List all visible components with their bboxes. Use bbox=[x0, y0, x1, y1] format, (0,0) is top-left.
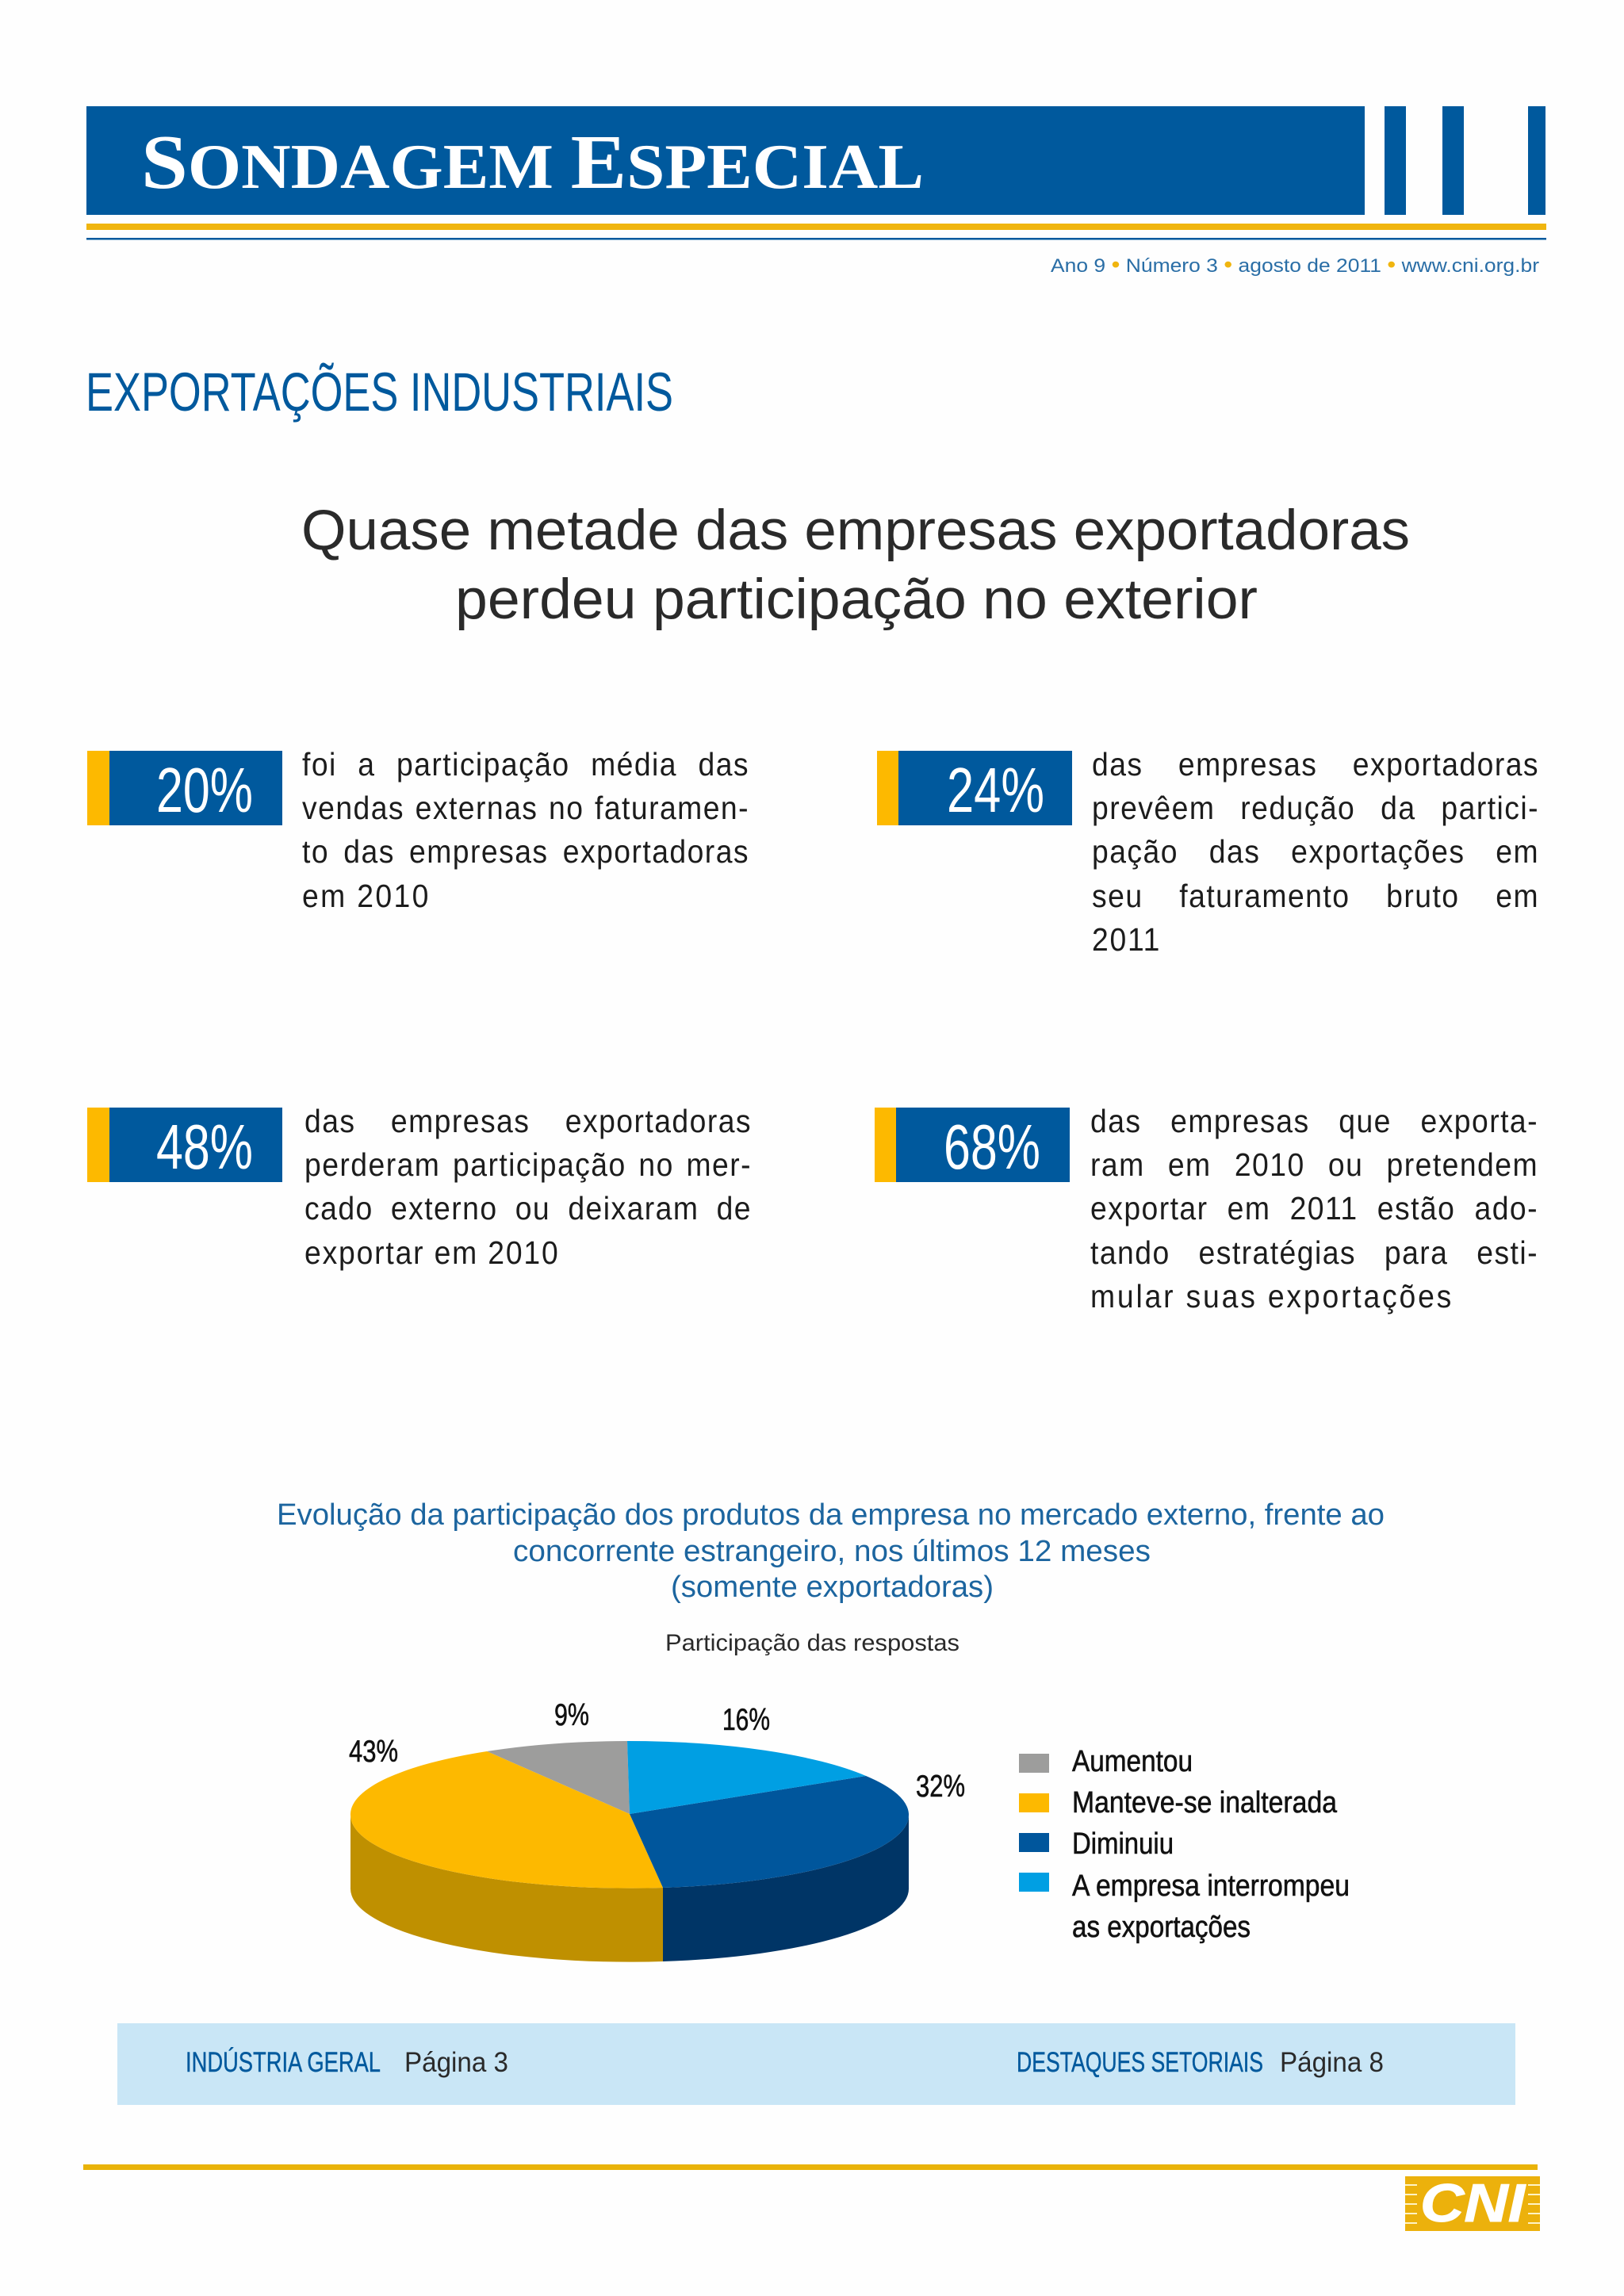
text: 48% description: perderam participação no mer- bbox=[304, 1146, 752, 1183]
headline bbox=[301, 499, 1410, 631]
text: 20% description: to das empresas exportadoras bbox=[302, 833, 749, 870]
slice: 9% Aumentou bbox=[487, 1741, 630, 1814]
text: 24% description: seu faturamento bruto em bbox=[1092, 878, 1539, 914]
title: Sondagem Especial: SONDAGEM ESPECIAL bbox=[141, 120, 924, 205]
footer navigation band: DESTAQUES SETORIAIS bbox=[1017, 2047, 1263, 2078]
text: 68% description: mular suas exportações bbox=[1090, 1278, 1454, 1314]
legend: as exportações bbox=[1072, 1911, 1251, 1944]
footer navigation band bbox=[117, 2023, 1515, 2105]
pie chart bbox=[349, 1698, 965, 1962]
badge: 24%: 24% bbox=[947, 755, 1044, 825]
text: 68% description: das empresas que exporta- bbox=[1090, 1103, 1538, 1139]
chart subtitle: Participação das respostas bbox=[665, 1630, 959, 1656]
CNI logo: CNI bbox=[1420, 2173, 1526, 2233]
slice: 32% Diminuiu bbox=[630, 1776, 909, 1888]
badge: 68%: 68% bbox=[944, 1112, 1040, 1182]
slice sides bbox=[350, 1814, 909, 1962]
CNI logo bbox=[1405, 2173, 1540, 2233]
legend: Aumentou bbox=[1072, 1745, 1193, 1778]
footer navigation band: Página 8 bbox=[1280, 2047, 1384, 2078]
badge: 48% bbox=[87, 1108, 282, 1182]
legend: Diminuiu bbox=[1072, 1827, 1174, 1861]
text: 68% description: exportar em 2011 estão ado- bbox=[1090, 1190, 1538, 1226]
badge: 20%: 20% bbox=[156, 755, 253, 825]
text: 24% description: 2011 bbox=[1092, 921, 1161, 958]
legend: A empresa interrompeu bbox=[1072, 1869, 1350, 1903]
pie labels: 9% bbox=[554, 1698, 589, 1732]
text: 68% description: ram em 2010 ou pretendem bbox=[1090, 1146, 1538, 1183]
panel: stat 20% bbox=[87, 746, 749, 914]
chart heading bbox=[277, 1498, 1385, 1604]
legend bbox=[1019, 1745, 1350, 1944]
pie labels: 16% bbox=[722, 1703, 770, 1737]
footer navigation band: INDÚSTRIA GERAL bbox=[186, 2047, 381, 2078]
text: 68% description bbox=[1090, 1103, 1538, 1314]
text: 48% description: exportar em 2010 bbox=[304, 1234, 560, 1271]
badge: 68% bbox=[875, 1108, 1070, 1182]
issue line: Ano 9 • Número 3 • agosto de 2011 • www.cni.org.br bbox=[1051, 252, 1539, 277]
badge: 48%: 48% bbox=[156, 1112, 253, 1182]
text: 20% description: vendas externas no faturamen- bbox=[302, 790, 749, 826]
text: 24% description: pação das exportações em bbox=[1092, 833, 1539, 870]
pie labels: 32% bbox=[916, 1770, 965, 1804]
text: 20% description: foi a participação média das bbox=[302, 746, 749, 783]
panel: stat 24% bbox=[877, 746, 1539, 958]
text: 24% description bbox=[1092, 746, 1539, 958]
headline: perdeu participação no exterior bbox=[455, 568, 1258, 631]
pie labels bbox=[349, 1698, 965, 1804]
text: 48% description bbox=[304, 1103, 752, 1271]
text: 20% description: em 2010 bbox=[302, 878, 431, 914]
badge: 20% bbox=[87, 751, 282, 825]
pie labels: 43% bbox=[349, 1735, 398, 1769]
legend: Manteve-se inalterada bbox=[1072, 1786, 1338, 1820]
text: 20% description bbox=[302, 746, 749, 914]
text: 68% description: tando estratégias para esti- bbox=[1090, 1234, 1538, 1271]
chart heading: concorrente estrangeiro, nos últimos 12 meses bbox=[513, 1535, 1151, 1568]
panel: stat 68% bbox=[875, 1103, 1538, 1314]
chart heading: Evolução da participação dos produtos da empresa no mercado externo, frente ao bbox=[277, 1498, 1385, 1532]
text: 24% description: prevêem redução da partici- bbox=[1092, 790, 1539, 826]
text: 48% description: das empresas exportadoras bbox=[304, 1103, 752, 1139]
headline: Quase metade das empresas exportadoras bbox=[301, 499, 1410, 562]
badge: 24% bbox=[877, 751, 1072, 825]
section heading: EXPORTAÇÕES INDUSTRIAIS bbox=[86, 362, 673, 423]
text: 24% description: das empresas exportadoras bbox=[1092, 746, 1539, 783]
panel: stat 48% bbox=[87, 1103, 752, 1271]
chart heading: (somente exportadoras) bbox=[671, 1571, 994, 1604]
header banner bbox=[86, 106, 1545, 215]
slice: 16% interrompeu bbox=[627, 1741, 866, 1814]
footer navigation band: Página 3 bbox=[404, 2047, 508, 2078]
slice: 43% Manteve-se inalterada bbox=[350, 1751, 663, 1888]
text: 48% description: cado externo ou deixaram de bbox=[304, 1190, 752, 1226]
